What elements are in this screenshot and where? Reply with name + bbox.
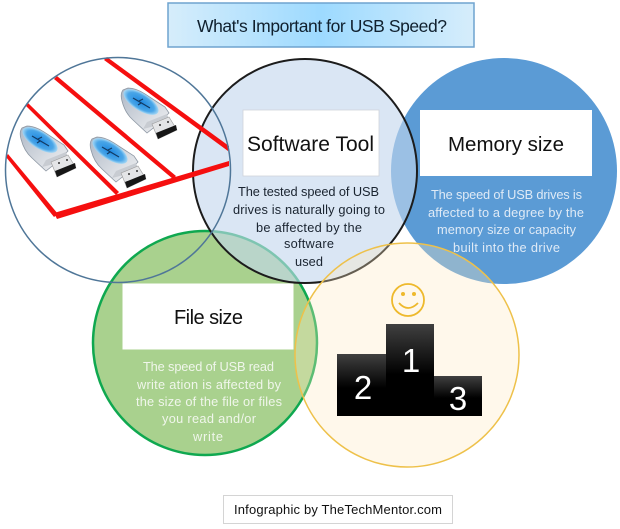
memory size description: The speed of USB drives is	[431, 187, 582, 202]
red track lines	[6, 57, 229, 219]
file size description: you read and/or	[162, 411, 257, 426]
file size heading box	[122, 284, 294, 350]
panel: memory size circle	[391, 58, 617, 284]
credit box: Infographic by TheTechMentor.com	[234, 502, 442, 517]
file size description: write	[192, 429, 223, 444]
panel: file size circle	[93, 231, 317, 455]
panel: podium circle	[295, 243, 519, 467]
title banner: What's Important for USB Speed?	[197, 16, 447, 36]
icon: smiley	[392, 284, 424, 316]
memory size description	[428, 187, 584, 255]
credit box	[224, 496, 452, 524]
file size description	[136, 359, 282, 444]
panel: usb race track circle	[6, 57, 230, 282]
software tool description: drives is naturally going to	[233, 202, 385, 217]
podium: 2	[354, 369, 372, 406]
podium	[337, 324, 482, 417]
software tool description	[233, 184, 385, 269]
podium: 3	[449, 380, 467, 417]
software tool description: be affected by the	[256, 220, 362, 235]
file size heading box: File size	[174, 307, 243, 329]
podium: 1	[402, 342, 420, 379]
software tool description: The tested speed of USB	[238, 184, 379, 199]
icon: usb drive 1	[19, 122, 76, 177]
file size description: write ation is affected by	[136, 377, 282, 392]
memory size description: built into the drive	[453, 240, 560, 255]
software tool description: used	[295, 254, 323, 269]
title banner	[168, 3, 474, 47]
panel: software tool circle	[193, 59, 417, 283]
software tool heading box	[243, 110, 379, 176]
file size description: The speed of USB read	[143, 359, 274, 374]
memory size heading box	[420, 110, 592, 176]
file size description: the size of the file or files	[136, 394, 282, 409]
icon: usb drive 3	[120, 84, 177, 139]
memory size description: affected to a degree by the	[428, 205, 584, 220]
memory size heading box: Memory size	[448, 133, 564, 156]
memory size description: memory size or capacity	[437, 222, 577, 237]
icon: usb drive 2	[89, 133, 146, 188]
software tool heading box: Software Tool	[247, 133, 374, 156]
software tool description: software	[284, 236, 334, 251]
